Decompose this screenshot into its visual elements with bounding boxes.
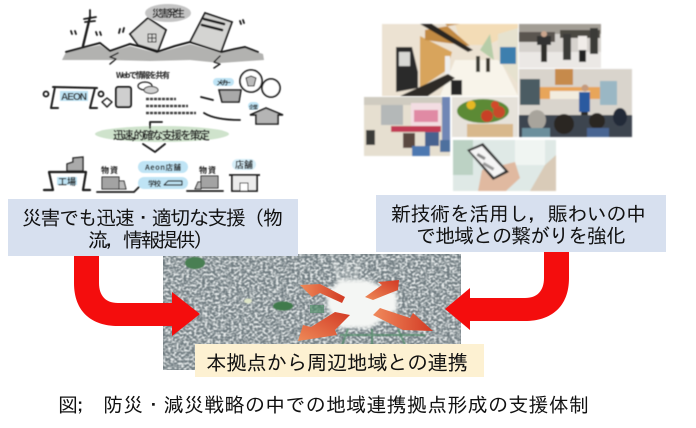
logistics row: 工場 <box>58 175 76 188</box>
right text box: new technology: で地域との繋がりを強化 <box>416 226 626 246</box>
orange arrows: linkage from the hub outward <box>298 280 433 341</box>
green band: decide rapid support <box>95 122 229 152</box>
caption: 防災・減災戦略の中での地域連携拠点形成の支援体制 <box>103 394 589 415</box>
makers and companies: メーカー <box>216 78 231 88</box>
AEON shop and web sharing <box>44 70 196 113</box>
illustration: disaster response sketch <box>44 4 283 192</box>
photo: vegetable box <box>452 97 518 137</box>
green parks <box>185 257 293 310</box>
photo collage: new technology and community <box>364 24 632 191</box>
yellow label: regional linkage <box>195 344 484 377</box>
central plaza <box>310 262 425 345</box>
photo: mall corridor <box>382 24 518 96</box>
bubble: disaster occurs <box>145 4 191 22</box>
photo: crowd in mall <box>519 24 601 68</box>
arrow: upper left <box>300 284 345 303</box>
right text box: new technology: 新技術を活用し，賑わいの中 <box>391 204 646 224</box>
caption: 図； <box>58 395 90 415</box>
logistics row: 店舗 <box>235 158 253 171</box>
left text box: rapid support: 流，情報提供） <box>88 230 213 250</box>
logistics row: 学校 <box>148 179 161 189</box>
right text box: new technology <box>376 195 666 252</box>
makers and companies: 企業 <box>249 104 258 111</box>
makers and companies <box>201 70 283 124</box>
aerial map photo <box>163 254 461 370</box>
AEON shop and web sharing: Webで情報を共有 <box>116 70 170 81</box>
bubble: disaster occurs: 災害発生 <box>152 5 185 20</box>
left text box: rapid support: 災害でも迅速・適切な支援（物 <box>22 207 283 228</box>
disaster scene <box>62 4 264 68</box>
arrow: upper right <box>365 280 399 300</box>
photo: community event stage <box>519 69 632 137</box>
red arrow: right box to hub <box>445 252 569 330</box>
arrow: lower right <box>373 308 433 331</box>
logistics row <box>44 157 260 192</box>
left text box: rapid support <box>8 199 298 256</box>
yellow label: regional linkage: 本拠点から周辺地域との連携 <box>206 352 468 373</box>
photo: hand with smartphone <box>453 140 556 191</box>
logistics row: 物資 <box>101 165 118 176</box>
logistics row: 物資 <box>199 165 216 176</box>
logistics row: Aeon店舗 <box>144 162 182 173</box>
arrow: lower left <box>298 312 350 341</box>
photo: seminar room <box>364 97 450 156</box>
AEON shop and web sharing: AEON <box>61 92 87 103</box>
green band: decide rapid support: 迅速,的確な支援を策定 <box>113 127 210 143</box>
red arrow: left box to hub <box>74 256 200 336</box>
